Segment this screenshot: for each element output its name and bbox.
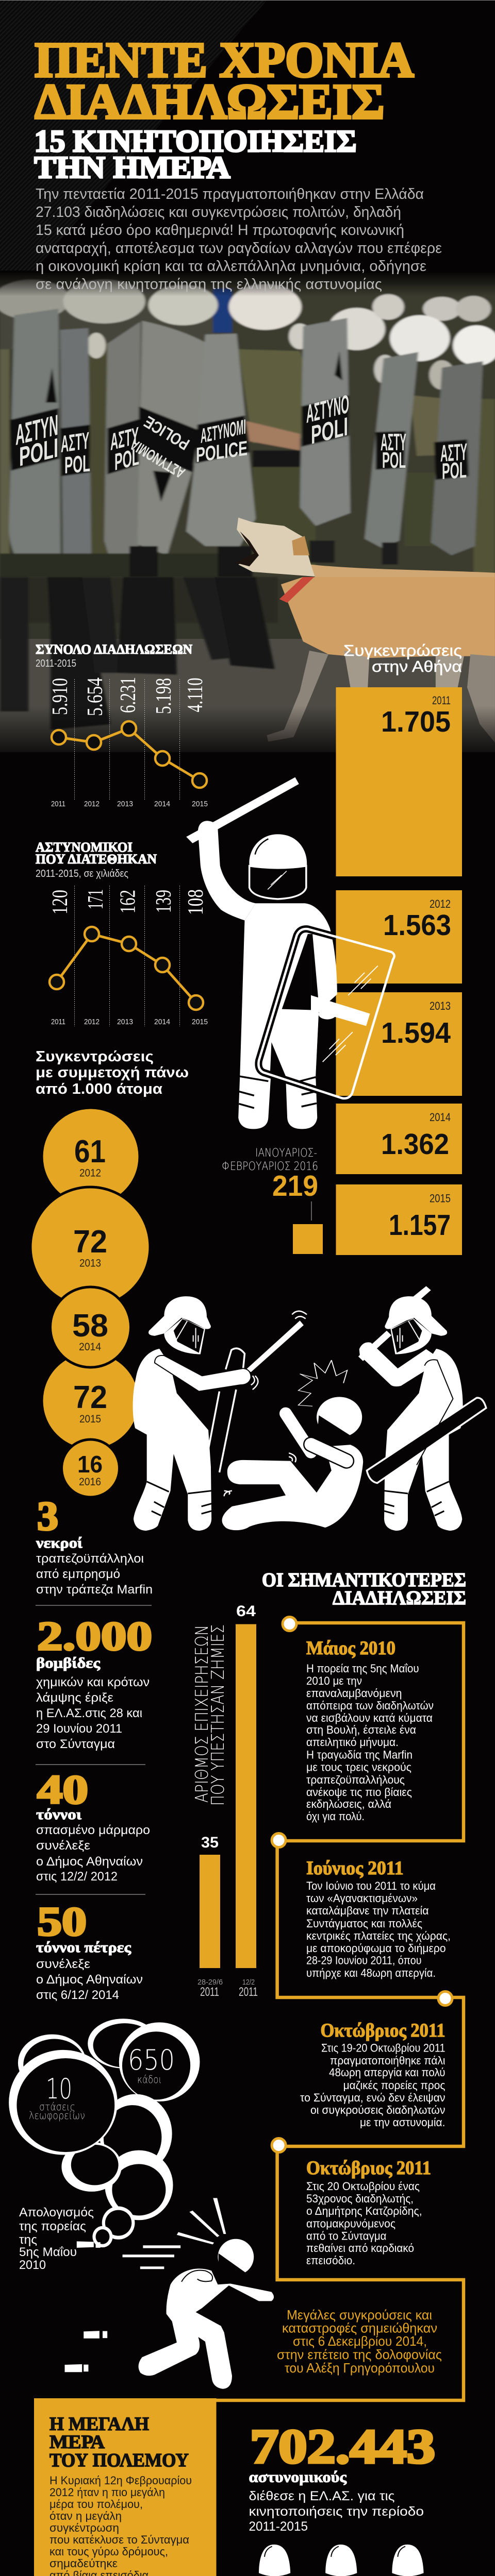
timeline entry: June 2011: Ιούνιος 2011: [306, 1858, 404, 1879]
photo scene: dog: [235, 518, 495, 742]
timeline entry: June 2011: με αποκορύφωμα το διήμερο: [306, 1942, 446, 1955]
bar chart: businesses damaged: 12/2: [242, 1978, 255, 1987]
stat: 702443 police: διέθεσε η ΕΛ.ΑΣ. για τις: [249, 2489, 395, 2503]
bar chart: gatherings in Athens per year: 2015: [430, 1192, 451, 1205]
small bar: January-February 2016: ΦΕΒΡΟΥΑΡΙΟΣ 2016: [222, 1160, 318, 1173]
line chart: total demonstrations: 4.110: [184, 678, 207, 712]
timeline entry: October 2011 strike: με την αστυνομία.: [360, 2116, 446, 2129]
bar chart: businesses damaged: 2011: [239, 1985, 258, 1999]
paragraph: όταν η μεγάλη: [50, 2510, 122, 2522]
stat: 50 tons of stones: 50: [37, 1900, 87, 1944]
timeline entry: May 2010: να εισβάλουν κατά κύματα: [306, 1711, 433, 1724]
icon: running demonstrator: [65, 2198, 274, 2389]
panel: hero photo of riot police and dog: [0, 270, 495, 768]
bar chart: businesses damaged: 64: [236, 1603, 256, 1620]
timeline entry: June 2011: Τον Ιούνιο του 2011 το κύμα: [306, 1879, 436, 1892]
paragraph: 2012 ήταν η πιο μεγάλη: [50, 2486, 165, 2499]
heading: Η ΜΕΓΑΛΗ: [50, 2414, 149, 2435]
stat: 50 tons of stones: στις 6/12/ 2014: [36, 1988, 119, 2002]
timeline entry: May 2010: 2010 με την: [306, 1674, 362, 1687]
photo scene: shield labels: POLICE: [141, 413, 193, 454]
line chart: police deployed: 171: [84, 889, 108, 909]
timeline entry: December 2014: Μεγάλες συγκρούσεις και: [287, 2307, 432, 2323]
title: ΠΕΝΤΕ ΧΡΟΝΙΑ: [35, 32, 414, 88]
bar chart: businesses damaged: ΑΡΙΘΜΟΣ ΕΠΙΧΕΙΡΗΣΕΩΝ: [192, 1625, 212, 1803]
stat: 2000 grenades: βομβίδες: [36, 1655, 101, 1671]
timeline entry: October 2011 death: [306, 2158, 431, 2267]
stat in cloud: 650 bins: 650: [128, 2044, 175, 2076]
timeline entry: October 2011 strike: Στις 19-20 Οκτωβρίου 2011: [321, 2041, 446, 2055]
stat: 2000 grenades: 29 Ιουνίου 2011: [36, 1722, 122, 1736]
timeline entry: October 2011 death: απομακρυνόμενος: [306, 2217, 395, 2230]
timeline entry: December 2014: του Αλέξη Γρηγορόπουλου: [285, 2360, 435, 2376]
stat: 40 tons of marble: [36, 1768, 150, 1894]
timeline entry: June 2011: [306, 1858, 451, 1979]
panel: the great day of the war: [34, 2398, 217, 2576]
paragraph: που κατέκλυσε το Σύνταγμα: [50, 2533, 189, 2546]
timeline entry: May 2010: επαναλαμβανόμενη: [306, 1687, 402, 1700]
timeline entry: October 2011 death: Οκτώβριος 2011: [306, 2158, 431, 2179]
line chart: total demonstrations: 2011-2015: [36, 658, 76, 669]
stat: 3 dead: νεκροί: [36, 1535, 82, 1551]
line chart: police deployed: 2013: [117, 1018, 133, 1026]
line chart: police deployed: 139: [152, 890, 176, 913]
bar chart: gatherings in Athens per year: 1.594: [381, 1016, 451, 1049]
bar chart: gatherings in Athens per year: 2014: [430, 1111, 451, 1124]
stat in cloud: 10 bus stops: 10: [46, 2073, 72, 2105]
timeline entry: December 2014: στις 6 Δεκεμβρίου 2014,: [293, 2333, 427, 2349]
paragraph: [50, 2474, 192, 2576]
timeline entry: October 2011 death: πεθαίνει από καρδιακό: [306, 2242, 414, 2255]
bar chart: gatherings in Athens per year: 1.362: [381, 1128, 449, 1161]
stat: 3 dead: τραπεζοϋπάλληλοι: [36, 1552, 144, 1566]
subtitle: 15 ΚΙΝΗΤΟΠΟΙΗΣΕΙΣ: [34, 124, 357, 158]
line chart: police deployed: ΠΟΥ ΔΙΑΤΕΘΗΚΑΝ: [36, 852, 157, 867]
line chart: police deployed: 108: [184, 889, 208, 915]
timeline entry: October 2011 strike: μαζικές πορείες προς: [343, 2079, 446, 2092]
bubble chain: gatherings per year: 58: [72, 1308, 108, 1344]
timeline entry: October 2011 strike: το Σύνταγμα, ενώ δεν έλειψαν: [300, 2091, 446, 2104]
stat in cloud: 10 bus stops: λεωφορείων: [29, 2109, 85, 2122]
timeline entry: December 2014: [277, 2307, 442, 2376]
photo scene: police line: [0, 279, 495, 579]
stat: 702443 police: 2011-2015: [249, 2519, 308, 2534]
stat: 40 tons of marble: σπασμένο μάρμαρο: [36, 1823, 150, 1837]
line chart: total demonstrations: 2011: [51, 800, 65, 808]
line chart: total demonstrations: 5.654: [84, 677, 107, 716]
paragraph: σημαδεύτηκε: [50, 2557, 118, 2570]
stat in cloud: 650 bins: κάδοι: [137, 2073, 162, 2086]
line chart: police deployed: 162: [117, 890, 140, 913]
bar chart: businesses damaged: [192, 1603, 258, 1999]
stat: 40 tons of marble: 40: [37, 1768, 88, 1812]
paragraph: Η Κυριακή 12η Φεβρουαρίου: [50, 2474, 192, 2487]
stat: 3 dead: στην τράπεζα Marfin: [36, 1583, 153, 1597]
stat: 40 tons of marble: συνέλεξε: [36, 1839, 90, 1853]
heading: [50, 2414, 189, 2471]
intro text: [36, 186, 442, 293]
bubble chain: gatherings per year: 16: [77, 1451, 103, 1478]
heading: gatherings in Athens: Συγκεντρώσεις: [343, 641, 462, 659]
caption: account of the May 2010 march: της πορείας: [19, 2219, 86, 2233]
intro text: Την πενταετία 2011-2015 πραγματοποιήθηκαν στην Ελλάδα: [36, 186, 424, 202]
timeline entry: May 2010: στη Βουλή, έστειλε ένα: [306, 1723, 416, 1736]
stat: 50 tons of stones: ο Δήμος Αθηναίων: [36, 1973, 143, 1987]
photo scene: shield labels: POL: [64, 450, 90, 479]
icon: three policemen with shields: [244, 2545, 458, 2576]
timeline entry: May 2010: απειλητικό μήνυμα.: [306, 1736, 399, 1749]
stat: 50 tons of stones: τόννοι πέτρες: [36, 1939, 131, 1956]
timeline entry: December 2014: καταστροφές σημειώθηκαν: [282, 2320, 437, 2336]
line chart: police deployed: [36, 840, 208, 1026]
photo scene: shield labels: [15, 389, 467, 484]
bar chart: gatherings in Athens per year: [336, 687, 462, 1255]
bubble chain: gatherings per year: 72: [73, 1224, 107, 1260]
heading: gatherings with over 1000 people: με συμμετοχή πάνω: [36, 1064, 189, 1081]
timeline path with dots: [34, 1617, 464, 2400]
bubble chain: gatherings per year: 2016: [79, 1476, 101, 1488]
timeline entry: May 2010: Η τραγωδία της Marfin: [306, 1749, 412, 1761]
stat: 702443 police: 702.443: [250, 2420, 435, 2473]
bar chart: gatherings in Athens per year: 2012: [430, 897, 451, 910]
timeline entry: May 2010: ανέκοψε τις πιο βίαιες: [306, 1786, 412, 1799]
bubble chain: gatherings per year: 72: [73, 1380, 107, 1415]
right riot policeman: [358, 1286, 486, 1531]
stat in cloud: 10 bus stops: στάσεις: [39, 2100, 75, 2113]
photo scene: shield labels: POL: [382, 448, 406, 473]
stat: 40 tons of marble: ο Δήμος Αθηναίων: [36, 1855, 143, 1869]
photo scene: shield labels: ΑΣΤΥ: [61, 427, 89, 457]
line chart: police deployed: 2011-2015, σε χιλιάδες: [36, 868, 128, 879]
timeline entry: October 2011 strike: Οκτώβριος 2011: [321, 2020, 446, 2041]
intro text: 15 κατά μέσο όρο καθημερινά! Η πρωτοφανής κοινωνική: [36, 222, 404, 239]
shields drawn as translucent grey panels: [9, 309, 61, 568]
stat: 3 dead: 3: [37, 1494, 58, 1539]
bubble chain: gatherings per year: 2012: [79, 1167, 101, 1179]
bar chart: gatherings in Athens per year: 1.563: [383, 909, 451, 942]
timeline entry: December 2014: στην επέτειο της δολοφονίας: [277, 2347, 442, 2362]
timeline entry: October 2011 death: ο Δημήτρης Κατζορίδης,: [306, 2205, 422, 2217]
photo scene: shield labels: POL: [114, 443, 139, 476]
icon: police shield outline and hand over the bars: [258, 929, 394, 1098]
timeline entry: October 2011 strike: πραγματοποιήθηκε πάλι: [330, 2054, 446, 2067]
heading: most important demonstrations: ΟΙ ΣΗΜΑΝΤΙΚΟΤΕΡΕΣ: [262, 1569, 466, 1591]
stat: 50 tons of stones: [36, 1900, 143, 2002]
line chart: total demonstrations: 5.910: [48, 678, 72, 715]
paragraph: συγκέντρωση: [50, 2521, 119, 2534]
small bar: January-February 2016: ΙΑΝΟΥΑΡΙΟΣ-: [255, 1147, 317, 1160]
small bar: January-February 2016: [222, 1147, 323, 1254]
line chart: police deployed: 2012: [84, 1018, 100, 1026]
caption: account of the May 2010 march: [19, 2206, 94, 2272]
timeline entry: May 2010: εκδηλώσεις, αλλά: [306, 1798, 391, 1810]
intro text: 27.103 διαδηλώσεις και συγκεντρώσεις πολιτών, δηλαδή: [36, 204, 401, 221]
timeline entry: May 2010: [306, 1638, 434, 1823]
demonstrator on the ground: [222, 1360, 363, 1530]
bubble chain: gatherings per year: 2015: [79, 1413, 101, 1425]
timeline entry: June 2011: υπήρχε και 48ωρη απεργία.: [306, 1967, 436, 1979]
timeline entry: June 2011: Συντάγματος και πολλές: [306, 1917, 422, 1930]
timeline entry: October 2011 strike: 48ωρη απεργία και πολύ: [329, 2066, 446, 2079]
line chart: total demonstrations: 2014: [154, 800, 170, 808]
timeline entry: June 2011: καταλάμβανε την πλατεία: [306, 1904, 429, 1917]
timeline entry: May 2010: τραπεζοϋπαλλήλους: [306, 1773, 405, 1786]
caption: account of the May 2010 march: 5ης Μαΐου: [19, 2245, 77, 2259]
timeline entry: May 2010: όχι για πολύ.: [306, 1810, 365, 1823]
photo scene: shield labels: ΑΣΤΥ: [381, 429, 406, 455]
photo scene: legs and ground: [0, 577, 278, 730]
heading: gatherings with over 1000 people: [36, 1048, 189, 1097]
timeline entry: October 2011 strike: οι συγκρούσεις διαδηλωτών: [310, 2104, 446, 2116]
timeline entry: October 2011 death: 53χρονος διαδηλωτής,: [306, 2192, 414, 2205]
timeline entry: October 2011 strike: [300, 2020, 446, 2129]
intro text: αναταραχή, αποτέλεσμα των ραγδαίων αλλαγών που επέφερε: [36, 240, 442, 257]
icon: riot policeman with baton and shield: [186, 777, 337, 1129]
bubble chain: gatherings per year: 2014: [79, 1341, 101, 1353]
stat: 702443 police: [249, 2420, 435, 2534]
timeline entry: June 2011: των «Αγανακτισμένων»: [306, 1892, 418, 1905]
stat: 3 dead: [36, 1494, 153, 1605]
timeline entry: October 2011 death: Στις 20 Οκτωβρίου ένας: [306, 2180, 420, 2193]
paragraph: και τους γύρω δρόμους,: [50, 2545, 168, 2558]
line chart: total demonstrations: 6.231: [117, 677, 140, 713]
timeline entry: June 2011: 28-29 Ιουνίου 2011, όπου: [306, 1954, 422, 1967]
heading: gatherings in Athens: [343, 641, 462, 675]
timeline entry: May 2010: Μάιος 2010: [306, 1638, 395, 1659]
photo scene: shield labels: POLICE: [196, 436, 248, 467]
bubble chain: gatherings per year: 2013: [79, 1257, 101, 1269]
line chart: police deployed: ΑΣΤΥΝΟΜΙΚΟΙ: [36, 840, 133, 855]
stat: 3 dead: από εμπρησμό: [36, 1567, 120, 1581]
paragraph: μέρα του πολέμου,: [50, 2498, 143, 2511]
subtitle: ΤΗΝ ΗΜΕΡΑ: [34, 150, 230, 184]
subtitle: [34, 124, 357, 184]
caption: account of the May 2010 march: 2010: [19, 2258, 46, 2272]
stat: 2000 grenades: στο Σύνταγμα: [36, 1737, 115, 1751]
stat: 2000 grenades: χημικών και κρότων: [36, 1675, 150, 1689]
heading: ΜΕΡΑ: [50, 2432, 105, 2453]
bar chart: businesses damaged: 28-29/6: [197, 1978, 223, 1987]
bar chart: businesses damaged: 2011: [200, 1985, 219, 1999]
stat: 702443 police: αστυνομικούς: [249, 2469, 346, 2485]
stat: 702443 police: κινητοποιήσεις την περίοδο: [249, 2504, 424, 2519]
photo scene: shield labels: ΑΣΤΥ: [110, 422, 139, 455]
heading: ΤΟΥ ΠΟΛΕΜΟΥ: [50, 2450, 189, 2471]
stat: 2000 grenades: [36, 1614, 152, 1765]
title: ΔΙΑΔΗΛΩΣΕΙΣ: [35, 74, 385, 129]
caption: account of the May 2010 march: Απολογισμός: [19, 2206, 94, 2219]
heading: gatherings in Athens: στην Αθήνα: [372, 657, 462, 675]
timeline entry: May 2010: Η πορεία της 5ης Μαΐου: [306, 1662, 419, 1675]
timeline entry: June 2011: κεντρικές πλατείες της χώρας,: [306, 1929, 451, 1942]
bubble chain: gatherings per year: [30, 1109, 150, 1497]
stat: 2000 grenades: λάμψης έριξε: [36, 1691, 113, 1705]
heading: most important demonstrations: ΔΙΑΔΗΛΩΣΕΙΣ: [333, 1587, 466, 1609]
line chart: total demonstrations: ΣΥΝΟΛΟ ΔΙΑΔΗΛΩΣΕΩΝ: [36, 642, 192, 657]
intro text: σε ανάλογη κινητοποίηση της ελληνικής αστυνομίας: [36, 276, 382, 293]
line chart: total demonstrations: 2013: [117, 800, 133, 808]
stat: 2000 grenades: 2.000: [37, 1614, 152, 1659]
photo scene: shield labels: ΑΣΤΥΝΟΜΙ: [201, 415, 246, 448]
photo scene: shield labels: POLI: [19, 433, 58, 472]
stat: 50 tons of stones: συνέλεξε: [36, 1957, 90, 1971]
stat: 40 tons of marble: τόννοι: [36, 1806, 81, 1823]
bar chart: gatherings in Athens per year: 1.705: [381, 705, 451, 738]
line chart: police deployed: 2011: [51, 1018, 65, 1026]
timeline entry: October 2011 death: επεισόδιο.: [306, 2254, 355, 2267]
timeline entry: May 2010: απόπειρα των διαδηλωτών: [306, 1699, 434, 1712]
photo scene: shield labels: POLI: [311, 412, 348, 450]
line chart: police deployed: 120: [48, 890, 72, 914]
line chart: police deployed: 2015: [192, 1018, 208, 1026]
photo scene: shield labels: ΑΣΤΥΝ: [15, 409, 58, 452]
line chart: total demonstrations: [36, 642, 208, 808]
stat in cloud: 10 bus stops: [29, 2073, 85, 2122]
heading: most important demonstrations: [262, 1569, 466, 1609]
bar chart: gatherings in Athens per year: 1.157: [389, 1209, 451, 1242]
intro text: η οικονομική κρίση και τα αλλεπάλληλα μνημόνια, οδήγησε: [36, 258, 426, 275]
stat: 2000 grenades: η ΕΛ.ΑΣ.στις 28 και: [36, 1706, 142, 1720]
icon: smoke cloud thought bubble: [9, 2019, 200, 2248]
bar chart: businesses damaged: 35: [201, 1834, 219, 1851]
bar chart: gatherings in Athens per year: 2011: [432, 694, 451, 707]
bar chart: businesses damaged: ΠΟΥ ΥΠΕΣΤΗΣΑΝ ΖΗΜΙΕΣ: [208, 1624, 228, 1806]
caption: account of the May 2010 march: της: [19, 2233, 37, 2247]
heading: gatherings with over 1000 people: Συγκεντρώσεις: [36, 1048, 154, 1065]
bar chart: gatherings in Athens per year: 2013: [430, 999, 451, 1012]
small bar: January-February 2016: 219: [272, 1170, 318, 1202]
photo scene: shield labels: POL: [442, 457, 467, 484]
photo scene: shield labels: ΑΣΤΥΝΟΜΙΑ: [127, 435, 188, 481]
photo scene: shield labels: ΑΣΤΥΝΟ: [306, 389, 349, 429]
title: [35, 32, 414, 129]
timeline entry: October 2011 death: από το Σύνταγμα: [306, 2230, 387, 2242]
line chart: police deployed: 2014: [154, 1018, 170, 1026]
icon: two policemen beating a demonstrator: [133, 1286, 486, 1531]
bubble chain: gatherings per year: 61: [74, 1134, 106, 1170]
line chart: total demonstrations: 2012: [84, 800, 100, 808]
timeline entry: May 2010: με τους τρεις νεκρούς: [306, 1761, 411, 1773]
line chart: total demonstrations: 5.198: [152, 678, 176, 714]
line chart: total demonstrations: 2015: [192, 800, 208, 808]
left riot policeman: [133, 1296, 307, 1531]
heading: gatherings with over 1000 people: από 1.000 άτομα: [36, 1081, 162, 1097]
stat: 40 tons of marble: στις 12/2/ 2012: [36, 1870, 118, 1884]
